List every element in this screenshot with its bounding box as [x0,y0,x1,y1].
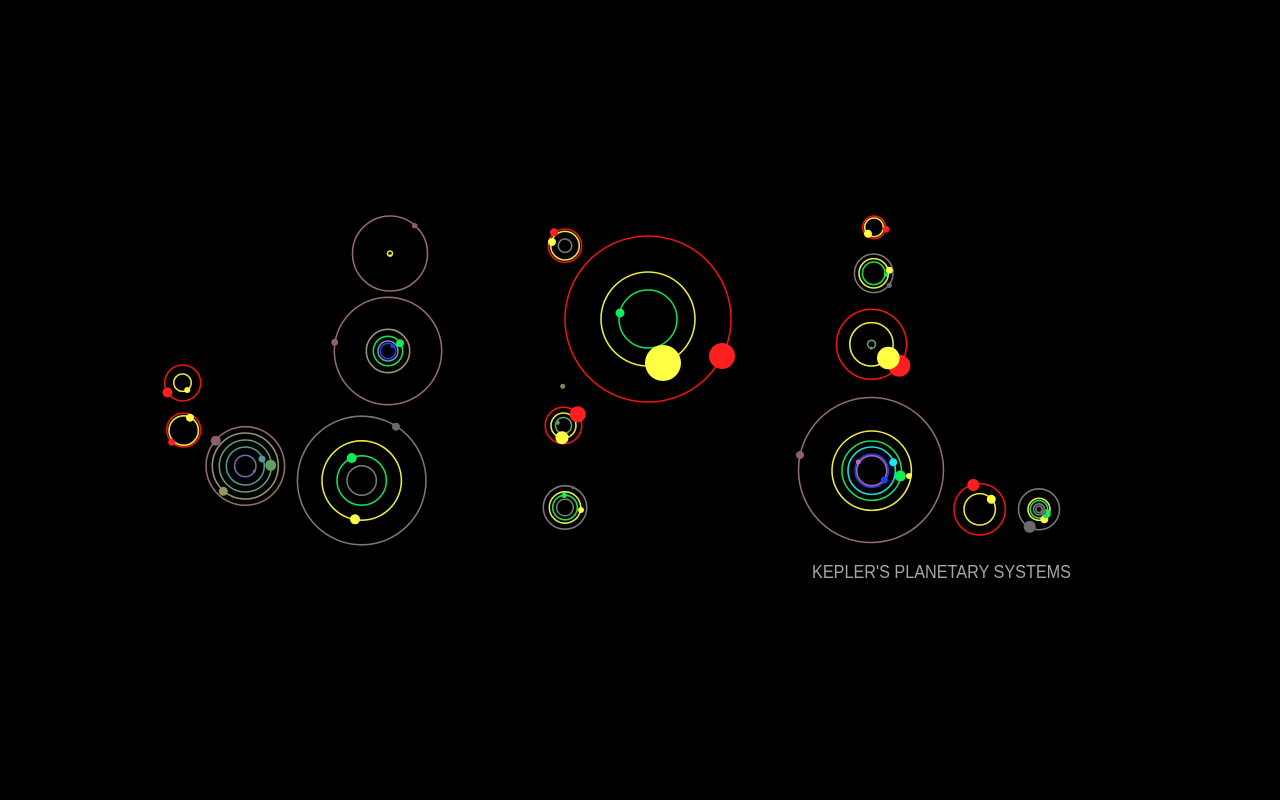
system: large central red, yellow and green [565,236,735,402]
system: small red and yellow, lower left [167,413,201,447]
title: KEPLER'S PLANETARY SYSTEMS [812,562,1071,582]
lone small planet [560,384,565,389]
system: right, gray yellow green [854,254,893,293]
system: five muted orbits [206,427,285,505]
system: lower right, red and yellow [954,479,1005,535]
system: top right, small [863,216,890,239]
system: small red and yellow, upper left [162,365,201,401]
system: bottom centre [543,486,587,529]
system: rose orbit with tight inner orbits [331,297,442,405]
system: gray, yellow, green, gray orbits [297,416,426,545]
system: top centre [548,228,582,262]
system: right, red with two large planets [836,309,910,379]
system: large rose with multicolour inner orbits [796,398,944,542]
system: wide rose orbit with tiny yellow centre [352,216,428,291]
system: centre, red with large planets [545,406,586,444]
system: far right, gray with tight inner orbits [1018,489,1060,533]
